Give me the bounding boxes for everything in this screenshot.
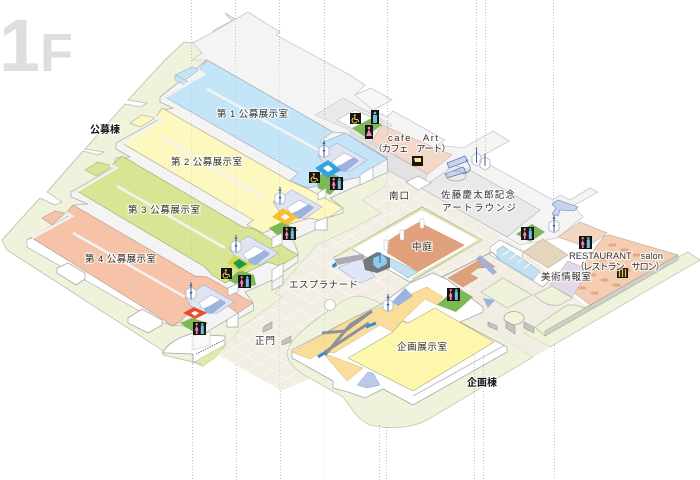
label: gallery 3: 第 3 公募展示室: [128, 204, 200, 216]
east fence: [545, 255, 678, 336]
sphere sculpture: [324, 300, 336, 310]
label: gallery 1: 第 1 公募展示室: [217, 108, 288, 120]
glass corridor: [490, 240, 550, 287]
label: Sato Keitaro lounge: [441, 189, 516, 214]
annex nook 3: [85, 162, 113, 176]
annex nook 4: [42, 211, 65, 225]
label: art information room: 美術情報室: [541, 271, 591, 283]
wall blocks at gallery ends: [227, 167, 373, 327]
corridor: cafe strip: [350, 132, 428, 188]
survey dotted lines: [192, 0, 554, 480]
annex nook 2: [130, 115, 155, 127]
stairs: special wing south: [357, 372, 380, 388]
small gray walls: [263, 321, 534, 345]
wall line 3: [77, 165, 116, 191]
central partition 2: [162, 137, 267, 200]
label: Sato Keitaro lounge: アートラウンジ: [442, 203, 516, 214]
room: east terracotta: [442, 252, 500, 287]
ground: special exhibition wing grounds: [287, 296, 533, 428]
courtyard garden: [387, 222, 465, 272]
central partition 3: [117, 186, 225, 248]
building: upper storage block: [192, 12, 598, 245]
label: Sato Keitaro lounge: 佐藤慶太郎記念: [441, 189, 515, 201]
icon: restaurant restroom: [579, 236, 592, 249]
ground: public wing grounds: [2, 13, 390, 366]
room: special wing orange hall: [292, 287, 443, 381]
floor label: 1F: F: [40, 23, 73, 83]
label: cafe art: [373, 133, 451, 155]
room base: public wing walls: [27, 60, 388, 333]
floor label: 1F: 1: [0, 4, 40, 87]
courtyard pale rim: [338, 209, 480, 279]
room: cafe art: [372, 125, 452, 174]
label: esplanade: エスプラナード: [289, 280, 358, 291]
icon: special wing restroom: [447, 288, 460, 301]
wall line 1: [165, 70, 204, 97]
plaza: esplanade paving: [218, 165, 590, 391]
label: gallery 4: 第 4 公募展示室: [85, 253, 156, 265]
label: gallery 2: 第 2 公募展示室: [171, 156, 242, 168]
courtyard glass: [388, 258, 418, 278]
stairs: courtyard escalators: [332, 254, 375, 283]
room: gallery 2: [122, 108, 343, 233]
stairs: art lounge staircases: [445, 156, 470, 181]
round planter: [504, 312, 524, 324]
central partition 1: [207, 89, 318, 150]
room: gallery 4: [32, 205, 253, 326]
label: special wing: 企画棟: [467, 376, 497, 389]
floor label: 1F: [0, 4, 73, 87]
label: main gate: 正門: [255, 336, 275, 347]
room: tan store: [523, 239, 568, 268]
label: special exhibition room: 企画展示室: [397, 341, 447, 353]
icon: restaurant restroom west: [516, 224, 545, 242]
icon: restaurant cutlery: [617, 268, 628, 278]
building: special wing base: [292, 273, 507, 405]
building: courtyard roof: [333, 207, 482, 282]
arrow: east entrance: [483, 298, 495, 308]
wall line 2: [122, 117, 161, 143]
restroom green patch: [437, 288, 473, 312]
label: courtyard: 中庭: [412, 241, 432, 253]
room: art information room: [550, 261, 589, 297]
central partition 4: [73, 233, 185, 297]
core: gallery 2 stairs and amenities: [269, 187, 322, 240]
east paving: [465, 272, 590, 357]
garden bed 2: [534, 286, 572, 305]
lift: east elevator: [549, 215, 559, 233]
gate gardens: [196, 344, 226, 366]
stairs: east cross staircase: [552, 200, 578, 216]
room: gallery 3: [77, 156, 298, 283]
core: gallery 3 stairs and amenities: [221, 235, 278, 288]
label: restaurant salon: [569, 251, 665, 273]
elevator block: courtyard: [363, 252, 390, 273]
label: restaurant salon: （レストラン サロン）: [575, 261, 665, 273]
wall line 4: [32, 213, 72, 238]
room: gallery 1: [165, 60, 387, 188]
building: dark service area: [315, 98, 392, 142]
core: gallery 1 stairs and amenities: [309, 140, 367, 195]
room: restaurant kitchen: [558, 222, 607, 247]
garden bed 1: [481, 278, 532, 308]
lift: special wing north: [383, 288, 413, 312]
side annexes: [57, 263, 162, 333]
entrance mat: south entrance: [406, 176, 431, 190]
courtyard pillars: [384, 219, 424, 250]
special wing inner wall lines: [413, 345, 505, 396]
restrooms: north amenity block: [337, 110, 382, 139]
annex nook 1: [175, 67, 199, 85]
lifts: art lounge elevators: [472, 147, 490, 170]
tile: east rooftop: [355, 88, 392, 110]
gate: main gate structure: [163, 332, 225, 363]
escalators: special wing: [318, 311, 376, 357]
label: cafe art: cafe Art: [388, 133, 438, 144]
label: cafe art: （カフェ アート）: [373, 143, 451, 155]
room: special exhibition room: [348, 308, 494, 391]
label: restaurant salon: RESTAURANT salon: [569, 251, 663, 262]
label: south entrance: 南口: [389, 190, 409, 202]
outer white wall strip: [27, 238, 170, 323]
room: restaurant hall with tables: [568, 235, 678, 305]
core: gallery 4 stairs and amenities: [180, 282, 234, 335]
ground: east garden strip: [523, 252, 700, 347]
garden bed 3: [535, 305, 585, 336]
lounge: Sato Keitaro art lounge: [421, 165, 540, 237]
label: public wing: 公募棟: [90, 123, 120, 136]
icon: cafe cup: [412, 156, 423, 166]
